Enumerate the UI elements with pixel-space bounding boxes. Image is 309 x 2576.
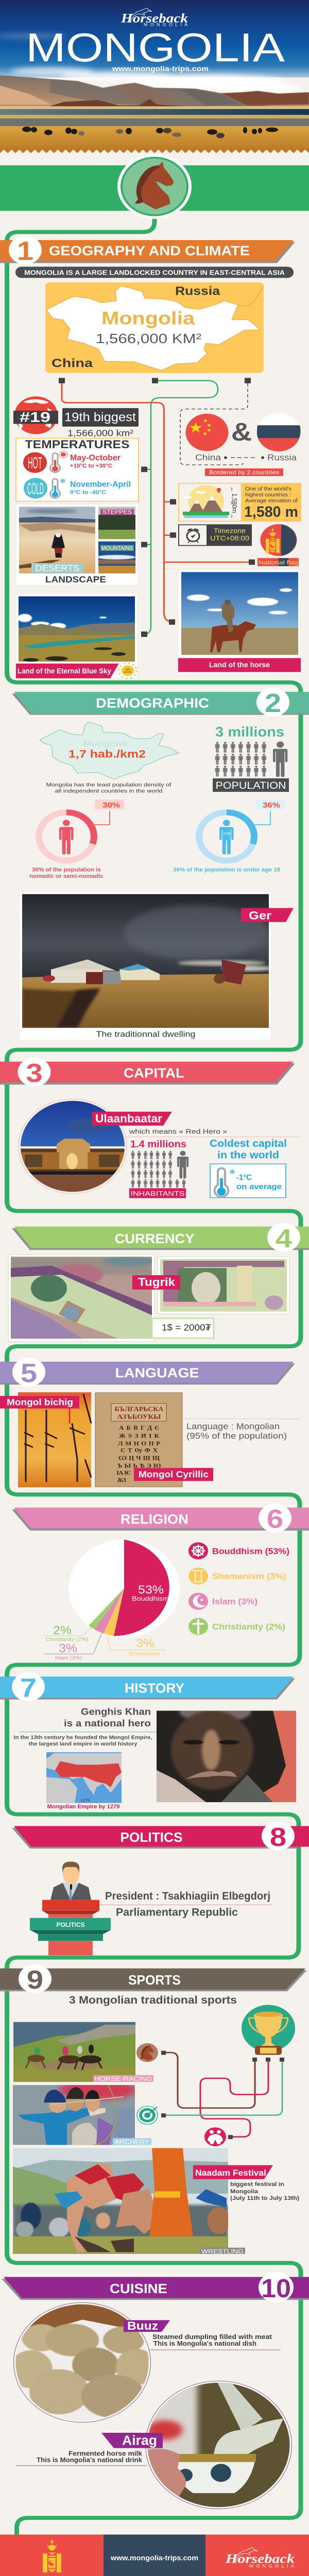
- photo: Cyrillic alphabet poster: Ъ Ы Ь Ѣ Э Ю: [117, 1462, 161, 1469]
- icon: archery target: [137, 2106, 158, 2124]
- chart: 30% nomadic donut: 30% of the population is: [32, 866, 101, 873]
- photo: archery: ARCHERY: [115, 2138, 149, 2145]
- airag text: Fermented horse milk: [68, 2450, 142, 2457]
- section header 4: currency: CURRENCY: [114, 1231, 195, 1246]
- section header 1: geography and climate: GEOGRAPHY AND CLIMATE: [49, 243, 250, 258]
- panel: land of the eternal blue sky: [16, 594, 138, 679]
- label: Mongol Cyrillic: Mongol Cyrillic: [139, 1469, 209, 1479]
- legend item: Shamanism: Shamanism (3%): [212, 1571, 286, 1581]
- photo: traditional dwelling: [22, 894, 273, 1028]
- icon: speaker at podium: POLITICS: [56, 1921, 85, 1928]
- legend item: Islam: [188, 1592, 258, 1610]
- section header 6: religion: RELIGION: [121, 1511, 188, 1527]
- label: Ulaanbaatar: [92, 1112, 301, 1137]
- icon: wrestlers: [204, 2127, 226, 2146]
- chart: 36% under 18 donut: [173, 800, 285, 873]
- photo: rider on horseback: [181, 572, 298, 655]
- title: MONGOLIA: [26, 25, 285, 70]
- density note: Mongolia has the least population density of: [46, 782, 171, 788]
- density note: [46, 782, 171, 794]
- photo: horse racing: [13, 2022, 153, 2082]
- icon: 250 days sun: [119, 663, 136, 679]
- legend item: Christianity: Christianity (2%): [212, 1622, 285, 1632]
- map: population density: 1,7 hab./km2: [68, 748, 146, 760]
- history text: In the 13th century he founded the Mongol Empire,: [14, 1735, 152, 1740]
- legend item: Shamanism: [188, 1567, 286, 1585]
- cold badge: ❄: [60, 478, 66, 485]
- map: Mongol Empire 1279: 1279: [80, 1798, 90, 1803]
- label: Airag: [101, 2432, 163, 2448]
- footer logo: Horseback: [225, 2551, 295, 2566]
- photo: wrestling: [13, 2148, 245, 2255]
- rank badge #19: #19: [20, 410, 50, 426]
- photo: Cyrillic alphabet poster: [95, 1393, 182, 1487]
- icon: mountains: [183, 485, 229, 518]
- map: Mongol Empire 1279: [46, 1752, 122, 1810]
- map: Mongolia and neighbours: Russia: [175, 285, 220, 298]
- population pictogram: POPULATION: [215, 780, 286, 791]
- panel: temperatures: November-April: [70, 480, 131, 489]
- connector lines: [62, 381, 250, 634]
- population pictogram: 3 millions: [215, 724, 284, 740]
- photo: Cyrillic alphabet poster: АЗЪБОУКЫ: [117, 1413, 161, 1420]
- photo: archery: [13, 2080, 151, 2145]
- panel: ger photo: [19, 891, 294, 1040]
- hot badge: HOT: [28, 454, 42, 472]
- section header 3: capital: [0, 1058, 295, 1088]
- cold badge: COLD: [27, 480, 44, 498]
- icon: horse badge: [136, 2043, 158, 2062]
- history text: the largest land empire in world history: [28, 1741, 138, 1747]
- label: Tugrik: Tugrik: [138, 1276, 176, 1289]
- map: population density: [40, 722, 179, 779]
- photo: mountains: [96, 541, 135, 573]
- section header 7: history: 7: [20, 1673, 37, 1703]
- section header 4: currency: 4: [276, 1224, 292, 1253]
- flag of Mongolia: National flag: [259, 559, 298, 566]
- photo: blue sky over lake: [18, 597, 135, 662]
- photo: desert: [19, 507, 95, 573]
- section header 3: capital: CAPITAL: [124, 1065, 184, 1080]
- connector nodes: [59, 378, 255, 637]
- section header 5: language: LANGUAGE: [115, 1365, 199, 1380]
- section header 3: capital: 3: [26, 1058, 43, 1088]
- photo: Mongol bichig script: [18, 1392, 91, 1487]
- photo: Ulaanbaatar government palace: [19, 1099, 127, 1195]
- section header 2: demographic: DEMOGRAPHIC: [96, 695, 209, 710]
- map: Mongol Empire 1279: Mongolian Empire by 1279: [47, 1804, 120, 1810]
- footer: [0, 2535, 309, 2576]
- label: Naadam festival: [193, 2165, 299, 2201]
- panel: timezone: [178, 524, 252, 546]
- language note: (95% of the population): [186, 1431, 287, 1440]
- density note: all independent countries in the world: [55, 788, 163, 794]
- panel: temperatures: +10°C to +30°C: [70, 462, 112, 469]
- section header 10: cuisine: [2, 2272, 309, 2303]
- map: Mongolia and neighbours: China: [52, 357, 93, 370]
- icon: 250 days sun: 250: [125, 668, 130, 671]
- icon: speaker at podium: [30, 1861, 111, 1955]
- label: Ulaanbaatar: which means « Red Hero »: [129, 1127, 227, 1135]
- pie label: Shamanism: 3%: [136, 1637, 154, 1650]
- chart: 30% nomadic donut: [29, 800, 124, 879]
- pie label: Islam: [44, 1633, 102, 1661]
- pie chart: religion: [43, 1539, 180, 1661]
- section header 8: politics: 8: [270, 1822, 286, 1852]
- green banner band: [0, 165, 309, 211]
- panel: landscape: DESERTS: [35, 563, 79, 573]
- flags: China and Russia: Russia: [267, 453, 297, 462]
- zigzag hero edge: [0, 149, 309, 156]
- icon: trophy: [242, 2005, 295, 2055]
- website url: www.mongolia-trips.com: [112, 65, 209, 73]
- pictogram: 1.4 million inhabitants: 1.4 millions: [130, 1139, 186, 1149]
- rank badge #19: [13, 396, 139, 438]
- sports subtitle: 3 Mongolian traditional sports: [69, 1994, 237, 2006]
- legend item: Christianity: [188, 1618, 285, 1635]
- panel: elevation: [179, 483, 301, 521]
- footer: www.mongolia-trips.com: [110, 2554, 198, 2562]
- legend item: Bouddhism: [188, 1543, 289, 1560]
- section header 7: history: [0, 1672, 295, 1703]
- icon: soyombo emblem: [43, 2539, 61, 2572]
- panel: land of the horse: Land of the horse: [209, 662, 270, 669]
- pie label: Shamanism: [107, 1636, 166, 1657]
- hero photo: Mongolian lake and steppe: [0, 0, 309, 156]
- logo: Horseback Mongolia: Horseback: [121, 11, 188, 25]
- panel: landscape: LANDSCAPE: [45, 574, 106, 584]
- icon: horse head badge: [117, 154, 192, 219]
- pie label: Shamanism: Shamanism: [129, 1651, 160, 1657]
- rank badge #19: 19th biggest: [64, 411, 136, 424]
- coldest capital callout: on average: [236, 1183, 282, 1191]
- panel: elevation: Average elevation of: [245, 498, 298, 504]
- photo: steppes: STEPPES: [102, 508, 132, 515]
- footer logo: [225, 2548, 295, 2568]
- pie label: Christianity: [43, 1624, 91, 1642]
- section header 2: demographic: 2: [265, 689, 281, 718]
- photo: Cyrillic alphabet poster: Ж Ѕ З И І К: [119, 1432, 159, 1439]
- Genghis Khan heading: [64, 1707, 151, 1729]
- panel: landscape: [16, 504, 138, 585]
- photo: Cyrillic alphabet poster: БЪЛГАРЬСКА: [114, 1405, 164, 1413]
- buuz text: This is Mongolia's national dish: [153, 2340, 256, 2347]
- pie label: Christianity: 2%: [53, 1624, 72, 1637]
- photo: horse racing: HORSE-RACING: [95, 2075, 152, 2082]
- connector lines: sports: [165, 2053, 282, 2137]
- dimension: 1,580m: 1,580m: [231, 493, 238, 513]
- photo: wrestling: WRESTLING: [201, 2248, 244, 2255]
- photo: Cyrillic alphabet poster: Ѡ Ц Ч Ш Щ: [118, 1454, 160, 1461]
- section header 7: history: HISTORY: [125, 1680, 184, 1696]
- panel: land of the eternal blue sky: Land of the Eternal Blue Sky: [18, 667, 112, 675]
- exchange rate box: [152, 1318, 214, 1338]
- photo: Cyrillic alphabet poster: ѪЗ: [117, 1477, 127, 1483]
- Genghis Khan heading: Genghis Khan: [81, 1707, 151, 1717]
- legend: religions: [188, 1543, 289, 1635]
- panel: temperatures: TEMPERATURES: [25, 438, 129, 451]
- coldest capital callout: Coldest capital: [210, 1137, 287, 1149]
- label: Buuz: Buuz: [127, 2319, 158, 2332]
- panel: temperatures: 0°C to -40°C: [70, 489, 106, 496]
- section header 4: currency: [12, 1223, 309, 1253]
- pictogram: 1.4 million inhabitants: INHABITANTS: [130, 1190, 184, 1197]
- label: Mongol bichig: Mongol bichig: [7, 1397, 73, 1407]
- panel: elevation: highest countries :: [245, 492, 291, 498]
- map: population density: Mongolia: [83, 739, 127, 748]
- pie label: Christianity: Christianity (2%): [45, 1637, 88, 1642]
- politics text: [99, 1890, 272, 1918]
- logo: Horseback Mongolia: MONGOLIA: [144, 22, 187, 27]
- section header 9: sports: [0, 1964, 307, 1994]
- flags: China and Russia: China: [195, 453, 221, 462]
- label: Buuz: [124, 2319, 170, 2332]
- pictogram: 1.4 million inhabitants: [129, 1139, 188, 1198]
- panel: ger photo: Ger: [249, 909, 271, 922]
- chart: 36% under 18 donut: 36% of the population is under age 18: [173, 866, 280, 873]
- section header 10: cuisine: 10: [261, 2274, 291, 2303]
- icon: alarm clock: [187, 529, 199, 543]
- pie chart: religion: 53%: [138, 1584, 164, 1596]
- chart: 36% under 18 donut: <18: [223, 832, 230, 836]
- subtitle pill: MONGOLIA IS A LARGE LANDLOCKED COUNTRY IN EAST-CENTRAL ASIA: [24, 268, 285, 276]
- section header 5: language: [0, 1358, 295, 1387]
- section header 8: politics: POLITICS: [120, 1829, 182, 1845]
- coldest capital callout: -1°C: [236, 1173, 252, 1182]
- flag of Mongolia: [258, 524, 299, 566]
- section header 10: cuisine: CUISINE: [110, 2281, 167, 2296]
- photo: 20000 tugrik banknote: [158, 1257, 289, 1314]
- panel: land of the horse: [178, 569, 301, 674]
- section header 6: religion: [12, 1503, 309, 1534]
- panel: ger photo: The traditionnal dwelling: [96, 1030, 196, 1039]
- panel: timezone: UTC+08:00: [210, 534, 249, 542]
- photo: buuz dumplings: [9, 2302, 157, 2422]
- icon: 250 days sun: DAYS: [124, 671, 132, 674]
- flags: China and Russia: Bordered by 2 countries: [209, 469, 279, 476]
- flag of Russia: [257, 413, 301, 451]
- coldest capital callout: [210, 1137, 287, 1198]
- label: Naadam festival: Naadam Festival: [195, 2168, 266, 2177]
- cold badge: [24, 478, 66, 499]
- photo: airag drink: [145, 2380, 292, 2510]
- coldest capital callout: in the world: [217, 1149, 279, 1161]
- map: Mongolia and neighbours: [45, 282, 264, 373]
- coldest capital callout: ❄: [229, 1168, 235, 1176]
- politics text: President : Tsakhiagiin Elbegdorj: [105, 1890, 270, 1902]
- photo: steppes: [98, 507, 135, 539]
- politics text: Parliamentary Republic: [116, 1906, 238, 1918]
- label: Naadam festival: biggest festival in: [230, 2181, 284, 2188]
- dimension: 1,580m: [231, 487, 238, 518]
- connector nodes: sports: [161, 2051, 284, 2139]
- panel: temperatures: May-October: [70, 453, 121, 462]
- panel: elevation: One of the world's: [245, 486, 292, 492]
- panel: timezone: Timezone: [214, 527, 246, 534]
- population pictogram: [213, 724, 289, 792]
- section header 1: geography and climate: 1: [17, 236, 33, 266]
- language note: Language : Mongolian: [186, 1421, 280, 1431]
- section header 5: language: 5: [21, 1359, 37, 1387]
- label: Ulaanbaatar: Ulaanbaatar: [95, 1112, 162, 1125]
- panel: temperatures: [16, 438, 139, 501]
- photo: Cyrillic alphabet poster: Л М Н О П Р: [118, 1440, 161, 1447]
- chart: 30% nomadic donut: 30%: [102, 801, 120, 809]
- language note: [182, 1419, 301, 1440]
- flags: China and Russia: &: [231, 418, 252, 446]
- pie label: Islam: Islam (3%): [55, 1655, 82, 1661]
- legend item: Islam: Islam (3%): [212, 1597, 258, 1606]
- airag text: [16, 2450, 147, 2466]
- subtitle pill: [15, 267, 294, 278]
- buuz text: [149, 2333, 281, 2350]
- photo: Genghis Khan statue: [157, 1710, 296, 1802]
- photo: Cyrillic alphabet poster: А Б В Г Д Є: [119, 1425, 159, 1431]
- exchange rate box: 1$ = 2000₮: [162, 1323, 212, 1332]
- section header 2: demographic: [12, 688, 309, 718]
- photo: mountains: MOUNTAINS: [101, 545, 133, 551]
- section header 6: religion: 6: [267, 1504, 283, 1534]
- pie label: Islam: 3%: [59, 1642, 77, 1655]
- flags: China and Russia: [185, 413, 301, 476]
- flag of China: [185, 414, 229, 451]
- photo: banknotes close-up: [8, 1255, 154, 1342]
- legend item: Bouddhism: Bouddhism (53%): [212, 1546, 289, 1556]
- rank badge #19: 1,566,000 km²: [67, 428, 133, 438]
- panel: elevation: 1,580 m: [244, 503, 298, 520]
- section header 9: sports: 9: [27, 1965, 43, 1994]
- label: Tugrik: [132, 1275, 180, 1290]
- map: Mongolia and neighbours: 1,566,000 KM²: [96, 331, 201, 346]
- airag text: This is Mongolia's national drink: [37, 2456, 142, 2464]
- label: Naadam festival: Mongolia: [230, 2188, 258, 2195]
- footer logo: MONGOLIA: [249, 2564, 294, 2568]
- label: Naadam festival: (July 11th to July 13th): [230, 2195, 299, 2201]
- chart: 36% under 18 donut: 36%: [263, 801, 280, 809]
- map: Mongolia and neighbours: Mongolia: [101, 308, 195, 328]
- chart: 30% nomadic donut: nomadic or semi-nomadic: [29, 873, 104, 879]
- history text: [14, 1732, 157, 1747]
- photo: Cyrillic alphabet poster: ІА ІЄ: [116, 1469, 131, 1476]
- section header 1: geography and climate: [0, 235, 295, 266]
- photo: Cyrillic alphabet poster: С Т Ѹ Ф Х: [121, 1447, 158, 1453]
- section header 8: politics: [12, 1822, 309, 1852]
- label: Airag: Airag: [122, 2432, 157, 2448]
- pie chart: religion: Bouddhism: [132, 1595, 169, 1602]
- section header 9: sports: SPORTS: [128, 1972, 181, 1988]
- Genghis Khan heading: is a national hero: [64, 1718, 151, 1729]
- buuz text: Steamed dumpling filled with meat: [152, 2333, 272, 2341]
